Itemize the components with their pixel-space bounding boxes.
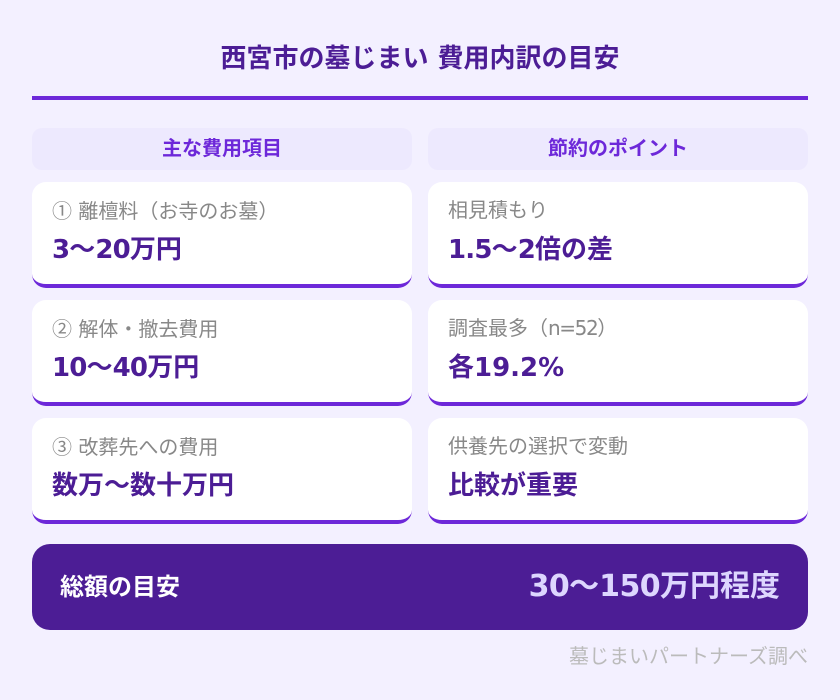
value: 数万〜数十万円: [52, 471, 234, 501]
column heading: saving points: [428, 128, 808, 170]
card: survey result: [428, 300, 808, 406]
label: 相見積もり: [448, 198, 548, 222]
label: ① 離檀料（お寺のお墓）: [52, 195, 278, 224]
value: 1.5〜2倍の差: [448, 235, 613, 265]
value: 各19.2%: [448, 353, 564, 383]
label: 調査最多（n=52）: [448, 316, 617, 340]
card: temple leaving fee: [32, 182, 412, 288]
title: 西宮市の墓じまい 費用内訳の目安: [220, 44, 620, 74]
total bar: [32, 544, 808, 630]
label: 供養先の選択で変動: [448, 434, 628, 458]
card: reburial cost: [32, 418, 412, 524]
value: 3〜20万円: [52, 235, 182, 265]
card: multiple quotes: [428, 182, 808, 288]
value: 10〜40万円: [52, 353, 199, 383]
column heading: saving points: 節約のポイント: [548, 136, 688, 160]
label: ③ 改葬先への費用: [52, 431, 218, 460]
column heading: main costs: 主な費用項目: [162, 136, 282, 160]
source note: 墓じまいパートナーズ調べ: [569, 644, 808, 668]
total value: 30〜150万円程度: [529, 569, 780, 604]
value: 比較が重要: [448, 471, 578, 501]
total label: 総額の目安: [60, 573, 180, 601]
column heading: main costs: [32, 128, 412, 170]
label: ② 解体・撤去費用: [52, 313, 218, 342]
card: memorial choice: [428, 418, 808, 524]
card: dismantling cost: [32, 300, 412, 406]
